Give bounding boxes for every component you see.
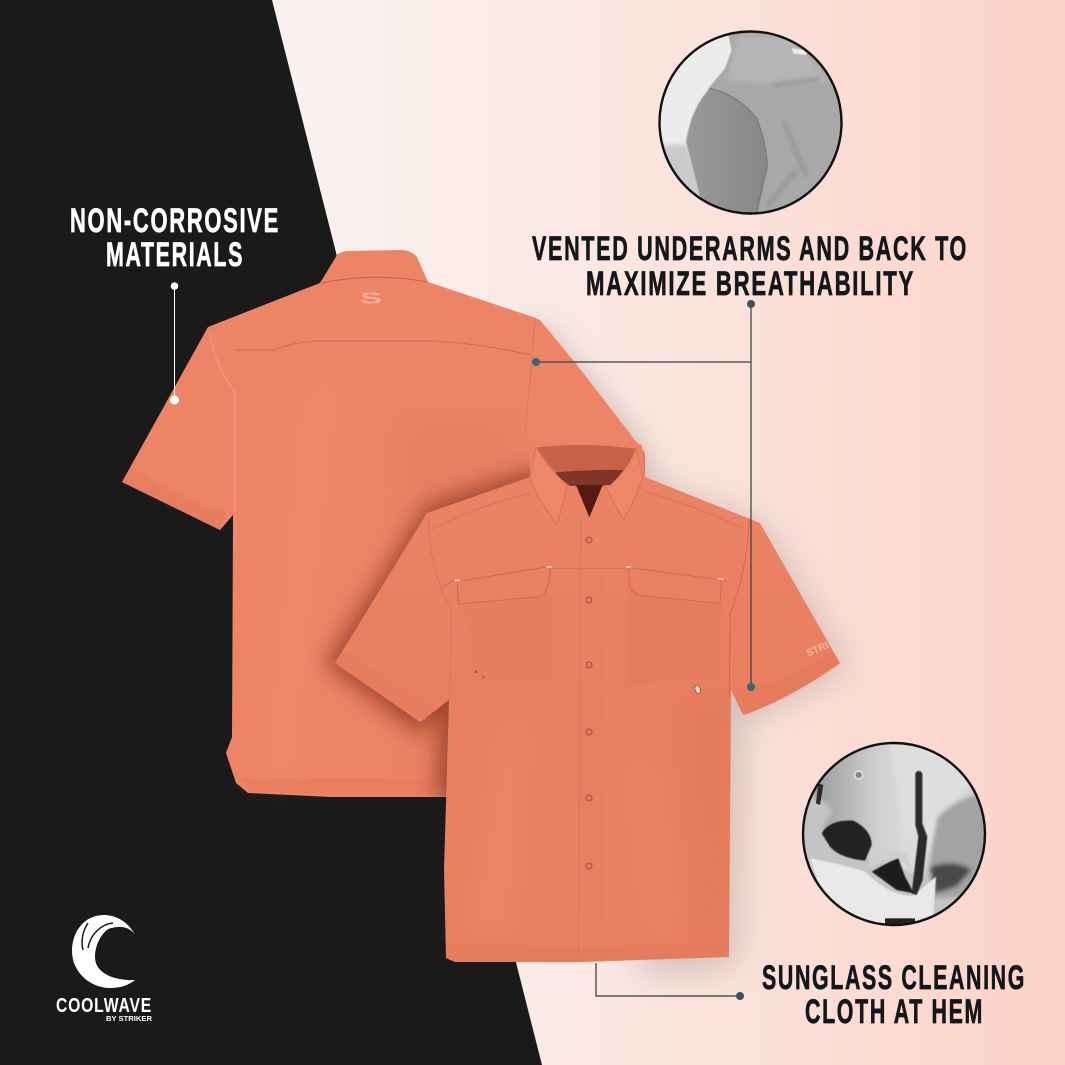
shirt shoulder highlight <box>727 37 830 83</box>
logo sub-brand: BY STRIKER <box>106 1014 153 1023</box>
sleeve hem left <box>337 650 433 720</box>
leader line: vented underarms <box>532 300 755 691</box>
hem loop icon <box>694 684 702 694</box>
detail photo: vented underarm <box>657 27 850 217</box>
back body fold highlight <box>255 380 345 780</box>
left fingers <box>815 800 832 828</box>
sleeve wordmark: STRI <box>805 640 831 659</box>
logo: Coolwave by Striker <box>56 915 153 1023</box>
sunglass arm left <box>816 783 823 805</box>
yoke seam left <box>430 493 530 530</box>
right armhole seam <box>729 518 749 697</box>
back folds <box>767 78 820 207</box>
front shirt soft shadow on background <box>640 477 850 975</box>
shirt top right highlight <box>792 48 807 55</box>
sunglass lens left <box>822 821 872 861</box>
right pocket <box>627 593 722 683</box>
circle outline <box>660 32 842 214</box>
heading: non-corrosive materials: MATERIALS <box>106 236 244 274</box>
heading: non-corrosive materials: NON-CORROSIVE <box>70 202 280 240</box>
right hand <box>929 794 984 900</box>
front fabric fold shading <box>446 942 730 962</box>
right collar leaf <box>607 449 643 520</box>
left armhole seam <box>428 515 452 702</box>
left collar leaf <box>530 447 567 525</box>
back body right shading <box>400 420 520 770</box>
front view shirt <box>335 442 840 963</box>
placket faint edge <box>600 570 602 962</box>
back left sleeve seam <box>210 332 235 550</box>
chest seam <box>443 568 730 587</box>
left pocket flap <box>457 567 550 604</box>
back right sleeve seam <box>525 318 535 435</box>
hand shadow <box>930 863 972 893</box>
button placket <box>578 518 581 962</box>
front shirt shadow <box>318 457 645 797</box>
sleeve hem right <box>738 652 840 715</box>
back yoke seam <box>235 341 530 355</box>
front buttons <box>586 537 592 869</box>
shirt upper right light <box>894 747 969 789</box>
heading: vented underarms and back <box>532 230 968 303</box>
cloth <box>810 858 936 930</box>
sunglass lens right <box>872 858 914 893</box>
sunglass arm upright <box>912 771 927 895</box>
open neck <box>576 485 603 517</box>
back logo mark: S <box>360 290 383 308</box>
shirt back <box>707 32 840 212</box>
vent mark <box>482 676 484 678</box>
back shirt shadow <box>500 320 665 700</box>
collar mesh band <box>553 470 624 486</box>
detail photo: sunglass cleaning cloth <box>800 740 993 930</box>
left pocket <box>463 593 552 682</box>
back view shirt <box>122 250 645 797</box>
back body hem band <box>240 778 448 795</box>
back sleeve hem band <box>122 467 226 530</box>
front collar and chest details <box>337 445 840 962</box>
logo inner wave <box>82 923 113 950</box>
sleeve seam <box>710 88 767 213</box>
right pocket flap <box>628 567 722 603</box>
heading: sunglass cleaning cloth <box>762 959 1026 1031</box>
shirt button <box>855 771 863 779</box>
bartack marks <box>455 567 723 581</box>
logo wordmark: COOLWAVE <box>56 995 152 1017</box>
yoke seam right <box>645 492 743 528</box>
small vents <box>475 670 477 673</box>
sleeve <box>686 88 767 217</box>
leader line: non-corrosive materials <box>170 282 179 404</box>
cloth inner fold <box>870 852 911 869</box>
background: black diagonal panel <box>0 0 542 1065</box>
back collar seam <box>322 277 428 283</box>
leader line: sunglass cloth <box>596 963 744 1000</box>
pouch tab <box>885 918 915 924</box>
heading: non-corrosive materials <box>70 202 280 274</box>
circle outline <box>803 743 985 925</box>
